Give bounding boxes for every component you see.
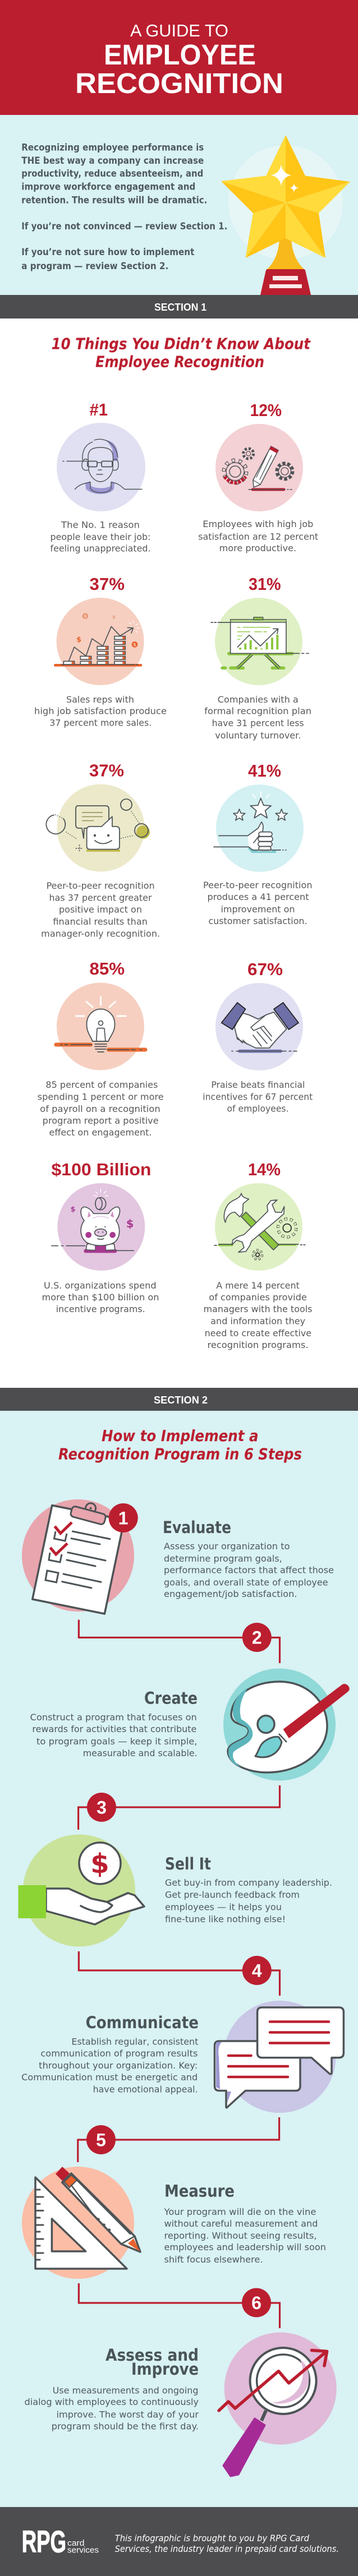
stat: 67%: incentives for 67 percent xyxy=(203,1091,313,1102)
stat: 12%: more productive. xyxy=(219,543,296,553)
stat: 12%: satisfaction are 12 percent xyxy=(198,532,318,542)
icon: paint palette and brush xyxy=(223,1669,350,1781)
stat: 85%: spending 1 percent or more xyxy=(38,1091,164,1102)
icon: coin stacks chart xyxy=(54,598,144,685)
icon: piggy bank: $ xyxy=(71,1205,75,1213)
stat: #1: people leave their job: xyxy=(51,532,150,542)
step text: sell it: fine-tune like nothing else! xyxy=(165,1914,286,1924)
footer credit text: This infographic is brought to you by RPG Card xyxy=(115,2533,310,2543)
title: employee: EMPLOYEE xyxy=(104,39,256,71)
stat: 12%: Employees with high job xyxy=(203,519,313,529)
logo: rpg card services: RPG xyxy=(22,2524,66,2559)
intro text block: a program — review Section 2. xyxy=(21,261,168,271)
stat: 14%: recognition programs. xyxy=(208,1340,309,1350)
heading: how to implement xyxy=(58,1427,302,1464)
icon: set square and pencil xyxy=(22,2167,140,2279)
step text: communicate: communication of program results xyxy=(40,2048,198,2059)
stat: 85%: 85% xyxy=(90,959,125,978)
step text: communicate xyxy=(21,2037,198,2095)
step text: measure: Your program will die on the vine xyxy=(163,2206,316,2217)
step text: assess and improve: dialog with employees to continuously xyxy=(25,2397,199,2407)
heading: how to implement: How to Implement a xyxy=(102,1427,259,1445)
stat: 41% xyxy=(203,761,312,926)
stat: 14%: A mere 14 percent xyxy=(216,1280,300,1291)
step 2: create xyxy=(30,1669,350,1781)
heading: how to implement: Recognition Program in 6 Steps xyxy=(58,1444,302,1464)
stat: 31%: Companies with a xyxy=(218,694,299,705)
step text: evaluate: goals, and overall state of employee xyxy=(164,1577,328,1588)
step heading: sell it: Sell It xyxy=(165,1854,211,1873)
step 6: assess and improve xyxy=(25,2333,337,2476)
panel: section 2 steps xyxy=(0,1411,358,2507)
stat: 85%: program report a positive xyxy=(43,1115,159,1126)
step heading: communicate: Communicate xyxy=(86,2013,199,2032)
stat: $100 billion: $100 Billion xyxy=(52,1160,152,1179)
stat: 41%: produces a 41 percent xyxy=(208,892,309,902)
icon: gold star trophy xyxy=(221,135,350,295)
icon: unappreciated person xyxy=(57,423,145,511)
stat: 12% xyxy=(198,400,318,553)
connector with badge 5: 5 xyxy=(96,2130,106,2150)
step text: communicate: Establish regular, consistent xyxy=(71,2037,198,2047)
stat: 37% peer: Peer-to-peer recognition xyxy=(47,880,155,891)
icon: clipboard checklist xyxy=(22,1499,134,1614)
stat: 14%: need to create effective xyxy=(205,1328,311,1338)
stat: #1: #1 xyxy=(90,400,108,419)
icon: piggy bank: $ xyxy=(126,1217,134,1230)
connector with badge 5 xyxy=(78,2117,279,2162)
step heading: create: Create xyxy=(144,1689,198,1708)
intro text block: THE best way a company can increase xyxy=(21,155,204,166)
connector with badge 3 xyxy=(79,1785,279,1830)
connector with badge 6 xyxy=(79,2283,279,2328)
step text: assess and improve: program should be the first day. xyxy=(52,2421,199,2431)
icon: coin stacks chart: $ xyxy=(112,615,116,620)
stat: 14%: of companies provide xyxy=(209,1292,307,1303)
icon: piggy bank xyxy=(52,1183,145,1271)
footer credit text xyxy=(115,2533,339,2554)
stat: 37% peer: manager-only recognition. xyxy=(41,929,160,939)
stat: $100 billion: more than $100 billion on xyxy=(42,1292,159,1303)
step text: evaluate xyxy=(164,1541,334,1599)
stat: 14%: 14% xyxy=(248,1160,281,1179)
stat: 31%: 31% xyxy=(249,574,281,594)
stat: 85% xyxy=(38,959,164,1138)
step text: measure: shift focus elsewhere. xyxy=(164,2254,263,2265)
intro text block: improve workforce engagement and xyxy=(21,182,195,192)
intro text block: retention. The results will be dramatic. xyxy=(21,195,207,205)
stat: $100 billion: U.S. organizations spend xyxy=(44,1280,157,1291)
stat: 12%: 12% xyxy=(250,400,282,420)
section 2 bar: SECTION 2 xyxy=(154,1395,208,1406)
icon: hammer and wrench xyxy=(214,1183,305,1271)
step text: create: rewards for activities that contribute xyxy=(32,1724,196,1734)
title: a guide to: A GUIDE TO xyxy=(130,21,228,40)
stat: 31%: have 31 percent less xyxy=(212,718,304,728)
step text: sell it: Get buy-in from company leadership. xyxy=(165,1877,332,1888)
step text: assess and improve: improve. The worst day of your xyxy=(56,2409,199,2420)
icon: light bulb xyxy=(54,982,148,1070)
step 3: sell it xyxy=(18,1835,332,1947)
step text: sell it xyxy=(165,1877,332,1924)
step text: create: Construct a program that focuses on xyxy=(30,1712,197,1723)
step heading: assess and improve: Assess and xyxy=(105,2346,199,2365)
section 1 bar xyxy=(0,295,358,318)
stat: 31%: formal recognition plan xyxy=(204,706,311,717)
step text: sell it: Get pre-launch feedback from xyxy=(165,1890,300,1900)
icon: hand holding dollar coin: $ xyxy=(90,1848,109,1880)
icon: hand holding dollar coin xyxy=(18,1835,144,1947)
stat: 14%: and information they xyxy=(210,1315,305,1326)
step heading: assess and improve xyxy=(105,2346,199,2379)
step text: create: measurable and scalable. xyxy=(83,1748,198,1758)
step text: create: to program goals — keep it simple, xyxy=(36,1736,198,1747)
panel: introduction xyxy=(0,115,358,295)
icon: thumbs up with stars xyxy=(214,784,304,872)
stat: 14%: managers with the tools xyxy=(203,1304,312,1314)
stat: $100 billion xyxy=(42,1160,159,1314)
stat: 67%: of employees. xyxy=(227,1104,288,1114)
section 1 bar: SECTION 1 xyxy=(154,302,206,313)
connector with badge 4 xyxy=(79,1951,279,1996)
stat: $100 billion: incentive programs. xyxy=(56,1304,145,1314)
stat: 67% xyxy=(203,959,313,1114)
connector with badge 3: 3 xyxy=(97,1798,107,1818)
stat: 37% peer: 37% xyxy=(89,761,124,781)
logo: rpg card services: services xyxy=(67,2546,99,2555)
intro text block xyxy=(21,142,227,271)
stat: 41%: improvement on xyxy=(221,904,295,915)
stat: 37% sales: 37 percent more sales. xyxy=(49,718,152,728)
footer credit text: Services, the industry leader in prepaid card solutions. xyxy=(115,2543,339,2554)
stat: #1 xyxy=(51,400,150,554)
icon: speech bubbles xyxy=(214,2001,343,2113)
intro text block: If you’re not convinced — review Section 1. xyxy=(21,221,227,232)
stat: 41%: customer satisfaction. xyxy=(209,916,307,926)
stat: 85%: effect on engagement. xyxy=(49,1127,152,1138)
stat: 37% peer: financial results than xyxy=(53,916,148,927)
badge: number 1 xyxy=(109,1503,138,1532)
intro text block: productivity, reduce absenteeism, and xyxy=(21,168,203,179)
panel: section 1 facts xyxy=(0,318,358,1388)
step text: communicate: throughout your organization. Key: xyxy=(39,2060,198,2071)
step text: evaluate: Assess your organization to xyxy=(164,1541,290,1552)
step text: evaluate: engagement/job satisfaction. xyxy=(164,1589,297,1599)
section 2 bar xyxy=(0,1388,358,1411)
step text: evaluate: performance factors that affect those xyxy=(164,1564,334,1575)
step 5: measure xyxy=(22,2167,326,2279)
step 1: evaluate xyxy=(22,1499,334,1614)
step text: measure: employees and leadership will soon xyxy=(164,2242,326,2252)
panel: footer xyxy=(0,2507,358,2576)
icon: coin stacks chart: $ xyxy=(76,635,81,644)
connector with badge 6: 6 xyxy=(251,2293,261,2313)
step text: assess and improve xyxy=(25,2385,199,2431)
step text: communicate: have emotional appeal. xyxy=(93,2084,198,2095)
stat: 14% xyxy=(203,1160,312,1350)
heading: 10 things: Employee Recognition xyxy=(95,353,264,371)
stat: 31%: voluntary turnover. xyxy=(215,730,301,741)
panel: title header xyxy=(0,0,358,115)
connector with badge 4: 4 xyxy=(252,1960,262,1981)
stat: 85%: of payroll on a recognition xyxy=(40,1104,160,1114)
icon: handshake xyxy=(215,983,303,1070)
intro text block: If you’re not sure how to implement xyxy=(21,247,194,257)
step heading: measure: Measure xyxy=(164,2181,235,2200)
badge: number 1: 1 xyxy=(118,1508,128,1529)
step text: create xyxy=(30,1712,198,1758)
heading: 10 things xyxy=(52,334,311,371)
stat: 37% peer: positive impact on xyxy=(59,904,142,915)
icon: magnifier with rising arrow xyxy=(219,2333,337,2476)
stat: 67%: 67% xyxy=(247,959,283,979)
stat: #1: feeling unappreciated. xyxy=(51,543,150,554)
step text: communicate: Communication must be energetic and xyxy=(21,2072,198,2083)
icon: coin stacks chart: $ xyxy=(133,642,136,647)
icon: chat bubbles with smile xyxy=(46,784,150,871)
stat: 67%: Praise beats financial xyxy=(211,1079,305,1090)
stat: 41%: 41% xyxy=(248,761,281,781)
step 4: communicate xyxy=(21,2001,343,2113)
connector with badge 2: 2 xyxy=(252,1627,262,1647)
stat: 37% sales: high job satisfaction produce xyxy=(34,706,167,717)
stat: 41%: Peer-to-peer recognition xyxy=(203,880,312,890)
step text: assess and improve: Use measurements and ongoing xyxy=(53,2385,199,2396)
stat: 85%: 85 percent of companies xyxy=(45,1079,158,1090)
stat: 37% peer: has 37 percent greater xyxy=(49,892,152,903)
stat: 31% xyxy=(204,574,311,741)
stat: 37% sales: 37% xyxy=(90,574,125,594)
heading: 10 things: 10 Things You Didn’t Know About xyxy=(52,334,311,353)
step text: measure: reporting. Without seeing results, xyxy=(164,2231,316,2241)
stat: 37% peer xyxy=(41,761,160,939)
icon: presentation board xyxy=(211,598,309,685)
title: recognition: RECOGNITION xyxy=(75,67,283,99)
icon: coin stacks chart: $ xyxy=(84,613,87,618)
intro text block: Recognizing employee performance is xyxy=(21,142,204,153)
logo: rpg card services: card xyxy=(67,2538,84,2548)
step text: evaluate: determine program goals, xyxy=(164,1553,282,1564)
step text: measure: without careful measurement and xyxy=(164,2218,318,2229)
stat: 37% sales: Sales reps with xyxy=(66,694,134,705)
icon: pencil and gears xyxy=(215,424,303,511)
step text: measure xyxy=(163,2206,326,2265)
step heading: evaluate: Evaluate xyxy=(163,1518,231,1537)
stat: 37% sales xyxy=(34,574,167,728)
step heading: assess and improve: Improve xyxy=(131,2360,199,2379)
stat: #1: The No. 1 reason xyxy=(61,519,140,530)
connector with badge 2 xyxy=(79,1620,279,1663)
step text: sell it: employees — it helps you xyxy=(165,1902,282,1913)
